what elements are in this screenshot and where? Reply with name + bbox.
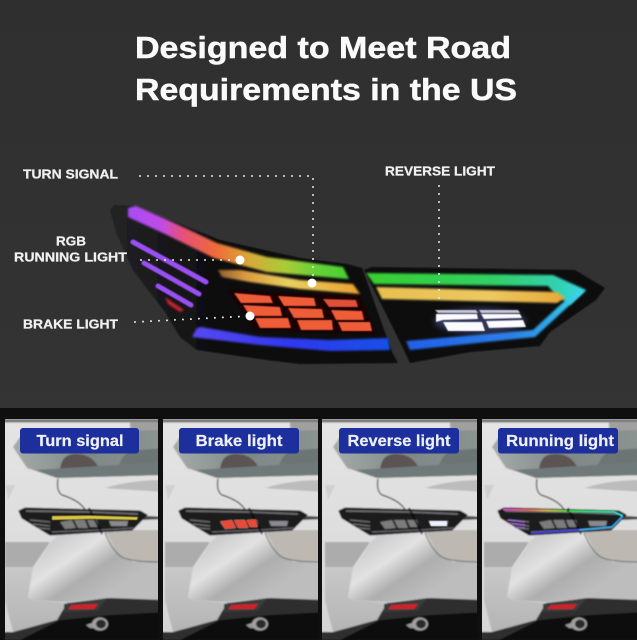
brake light red blocks <box>234 293 372 331</box>
label: turn signal <box>20 428 139 454</box>
green to cyan top strip <box>366 273 586 305</box>
callout: RGB running light: RGB <box>56 234 86 248</box>
label: running light <box>498 428 618 454</box>
reverse glow <box>434 308 526 334</box>
label: running light: Running light <box>506 433 615 450</box>
purple side bars <box>133 242 206 305</box>
RGB running outline <box>503 510 623 533</box>
label: brake light: Brake light <box>196 433 283 450</box>
lamp housing left <box>110 205 398 364</box>
callout: RGB running light: RUNNING LIGHT <box>14 250 127 264</box>
callout: turn signal <box>23 166 316 288</box>
panel: reverse light <box>320 415 485 640</box>
dark red backing behind brake blocks <box>228 290 376 334</box>
cyan to blue lower strip <box>406 290 586 350</box>
yellow strip right <box>376 287 565 303</box>
yellow strip left <box>218 270 360 294</box>
label: turn signal: Turn signal <box>36 433 124 450</box>
car photo <box>320 415 485 640</box>
lamp housing right <box>364 267 605 363</box>
label: brake light <box>179 428 299 454</box>
left tail lamp <box>110 205 398 364</box>
title <box>135 30 517 107</box>
red accent under purple bar <box>165 297 184 312</box>
callout: turn signal: TURN SIGNAL <box>23 166 118 182</box>
bottom dark band <box>0 408 637 640</box>
panel: turn signal <box>0 415 165 640</box>
label: reverse light: Reverse light <box>348 433 451 450</box>
panel: brake light <box>160 415 325 640</box>
yellow turn strip <box>52 516 138 520</box>
panel: running light <box>479 415 637 640</box>
red brake blocks <box>220 519 258 529</box>
title: Requirements in the US <box>135 72 517 107</box>
reverse light white blocks <box>435 310 526 331</box>
callout: brake light: BRAKE LIGHT <box>23 316 118 332</box>
car photo <box>160 415 325 640</box>
car photo <box>479 415 637 640</box>
car photo <box>0 415 165 640</box>
label: reverse light <box>339 428 459 454</box>
right tail lamp <box>364 267 605 363</box>
callout: RGB running light <box>14 234 244 264</box>
callout: brake light <box>23 312 254 332</box>
callout: reverse light: REVERSE LIGHT <box>385 164 495 178</box>
white reverse blocks <box>429 521 447 526</box>
title: Designed to Meet Road <box>135 30 511 65</box>
RGB top strip <box>128 206 349 279</box>
blue bottom strip <box>192 327 390 351</box>
